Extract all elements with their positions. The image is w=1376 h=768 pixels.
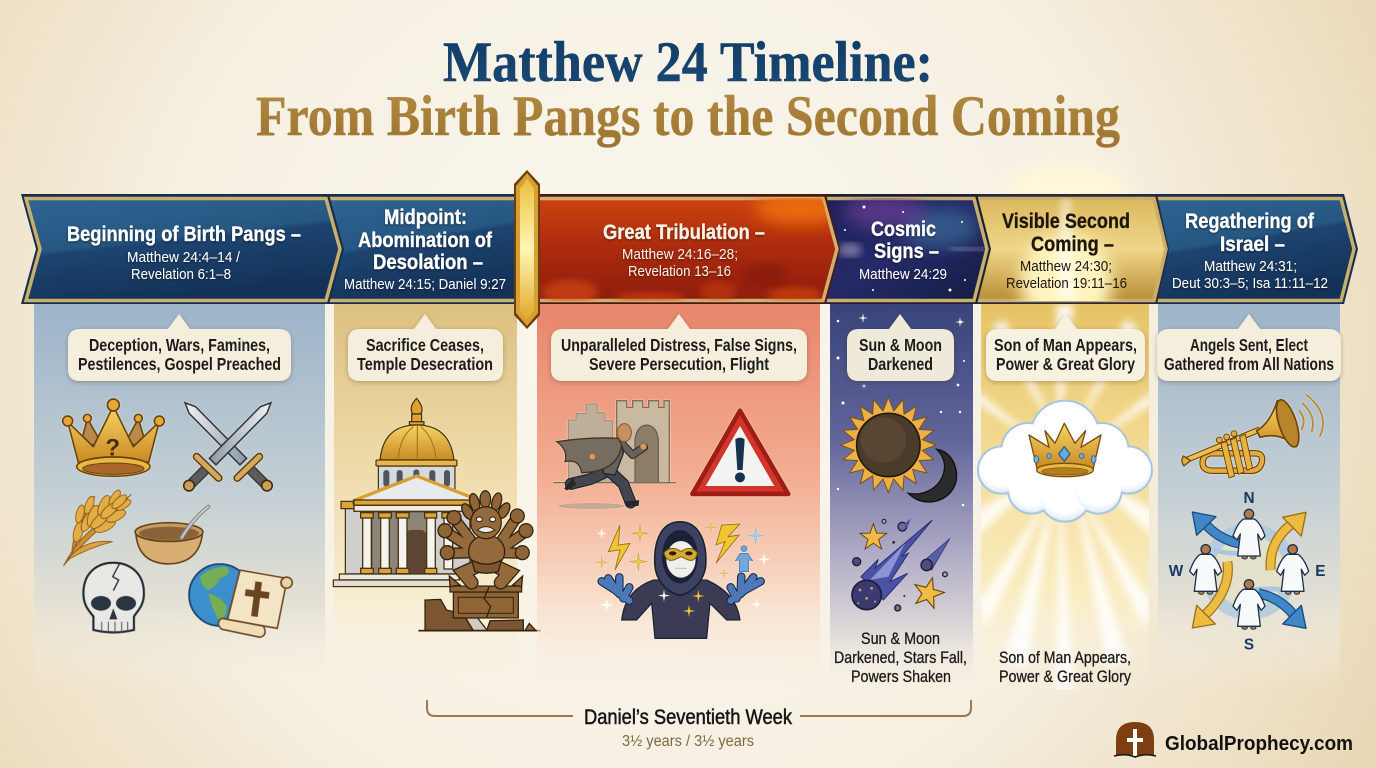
panel: midpoint abomination [333,304,541,690]
panel: visible second coming [977,304,1153,690]
icon: cross and open book [1114,722,1156,757]
callout: regathering [1157,314,1341,381]
icon: idol statue on broken pedestal [418,491,541,631]
callout: regathering: Gathered from All Nations [1164,354,1334,374]
banner: regathering of israel: Deut 30:3–5; Isa 11:11–12 [1172,275,1328,292]
compass letters [1169,490,1325,654]
banner: midpoint: Desolation – [373,250,483,274]
icon: masked false prophet with signs [596,522,770,638]
bracket label: Daniel’s Seventieth Week [584,706,792,729]
callout: cosmic [847,314,954,381]
banner: great tribulation: Great Tribulation – [603,220,765,244]
title line 2: From Birth Pangs to the Second Coming [256,85,1120,148]
icon: cracked skull [83,563,144,633]
bracket: daniel's seventieth week [427,700,971,750]
compass letters: S [1244,637,1254,654]
text: cosmic description [834,630,967,686]
banner: regathering of israel: Regathering of [1185,209,1315,233]
icon: trumpet [1182,395,1323,478]
icon: empty bowl [135,507,208,564]
callout: birth pangs: Deception, Wars, Famines, [89,335,270,355]
compass letters: W [1169,563,1184,580]
icon: four-direction gathering compass [1169,490,1325,654]
logo text: GlobalProphecy.com [1165,733,1353,755]
callout: midpoint: Temple Desecration [357,354,493,374]
icon: fleeing figure before city gate [553,401,676,509]
banner: great tribulation: Revelation 13–16 [628,263,731,280]
text: second coming description: Son of Man Appears, [999,649,1131,667]
banner: beginning of birth pangs: Revelation 6:1–8 [131,266,231,283]
banner: visible second coming [977,194,1169,304]
callout: midpoint [348,314,503,381]
icon: crossed swords [184,403,272,491]
banner: visible second coming: Matthew 24:30; [1020,258,1112,275]
banner: visible second coming: Revelation 19:11–16 [1006,275,1127,292]
callout: tribulation: Severe Persecution, Flight [589,354,769,374]
callout: birth pangs: Pestilences, Gospel Preached [78,354,281,374]
banner: midpoint [326,194,530,304]
banner: cosmic signs: Matthew 24:29 [859,266,947,283]
callout: birth pangs [68,314,291,381]
text: cosmic description: Darkened, Stars Fall, [834,649,967,667]
title line 1: Matthew 24 Timeline: [443,31,933,94]
icon: dark crescent moon [908,449,957,502]
glow above second coming banner [1006,164,1126,216]
banner: regathering of israel: Matthew 24:31; [1204,258,1297,275]
figures: gathered elect [1190,509,1309,629]
callout: cosmic: Darkened [868,354,933,374]
text: second coming description [999,649,1132,686]
icon: crown with question mark: ? [105,434,120,461]
callout: second coming: Power & Great Glory [996,354,1135,374]
text: second coming description: Power & Great Glory [999,668,1132,686]
banner: visible second coming: Visible Second [1002,209,1130,233]
arrows [1192,512,1306,628]
callout: tribulation [551,314,807,381]
banner: midpoint: Abomination of [358,228,493,252]
midpoint gold marker [514,170,540,329]
banner: cosmic signs: Signs – [874,239,939,263]
banner: cosmic signs [818,194,991,304]
timeline banner [21,170,1358,330]
banner: cosmic signs: Cosmic [871,217,936,241]
callout: cosmic: Sun & Moon [859,335,942,355]
callout: regathering: Angels Sent, Elect [1190,335,1308,355]
banner: great tribulation: Matthew 24:16–28; [622,246,738,263]
banner: midpoint: Matthew 24:15; Daniel 9:27 [344,276,506,293]
icon: crown with question mark [63,399,164,476]
bracket sublabel: 3½ years / 3½ years [622,733,754,750]
panel: beginning of birth pangs [34,304,325,690]
icon: glory cloud [979,402,1151,521]
icon: warning triangle [692,411,788,494]
banner: beginning of birth pangs: Matthew 24:4–14 / [127,249,241,266]
banner: visible second coming: Coming – [1031,232,1114,256]
compass letters: N [1243,490,1255,507]
callout: midpoint: Sacrifice Ceases, [366,335,484,355]
text: cosmic description: Powers Shaken [851,668,951,686]
icons: cosmic [841,397,957,611]
icon: temple [333,398,472,587]
icon: darkened sun [841,397,936,493]
logo: GlobalProphecy.com [1114,722,1353,757]
text: cosmic description: Sun & Moon [861,630,940,648]
icon: falling stars and meteors [852,518,950,611]
banner: regathering of israel: Israel – [1220,232,1285,256]
callout: tribulation: Unparalleled Distress, False Signs, [561,335,797,355]
icons: regathering [1169,395,1325,654]
title [256,31,1120,148]
compass letters: E [1315,563,1325,580]
callout: second coming: Son of Man Appears, [994,335,1137,355]
banner: midpoint: Midpoint: [384,205,467,229]
icon: wheat [63,488,133,566]
icons: temple and idol [333,398,541,631]
icon: globe and gospel scroll [189,564,292,637]
icon: golden crown [1029,423,1101,477]
banner: great tribulation [536,192,845,304]
banner: beginning of birth pangs [21,194,344,304]
panel: cosmic signs [830,304,973,690]
panel: regathering of israel [1157,304,1341,690]
icons: tribulation [553,401,788,638]
callout: second coming [986,314,1145,381]
banner: regathering of israel [1150,194,1358,304]
icon: crown on cloud [979,402,1151,521]
panel: great tribulation [537,304,820,690]
icons: birth pangs [63,399,292,637]
banner: beginning of birth pangs: Beginning of Birth Pangs – [67,222,301,246]
